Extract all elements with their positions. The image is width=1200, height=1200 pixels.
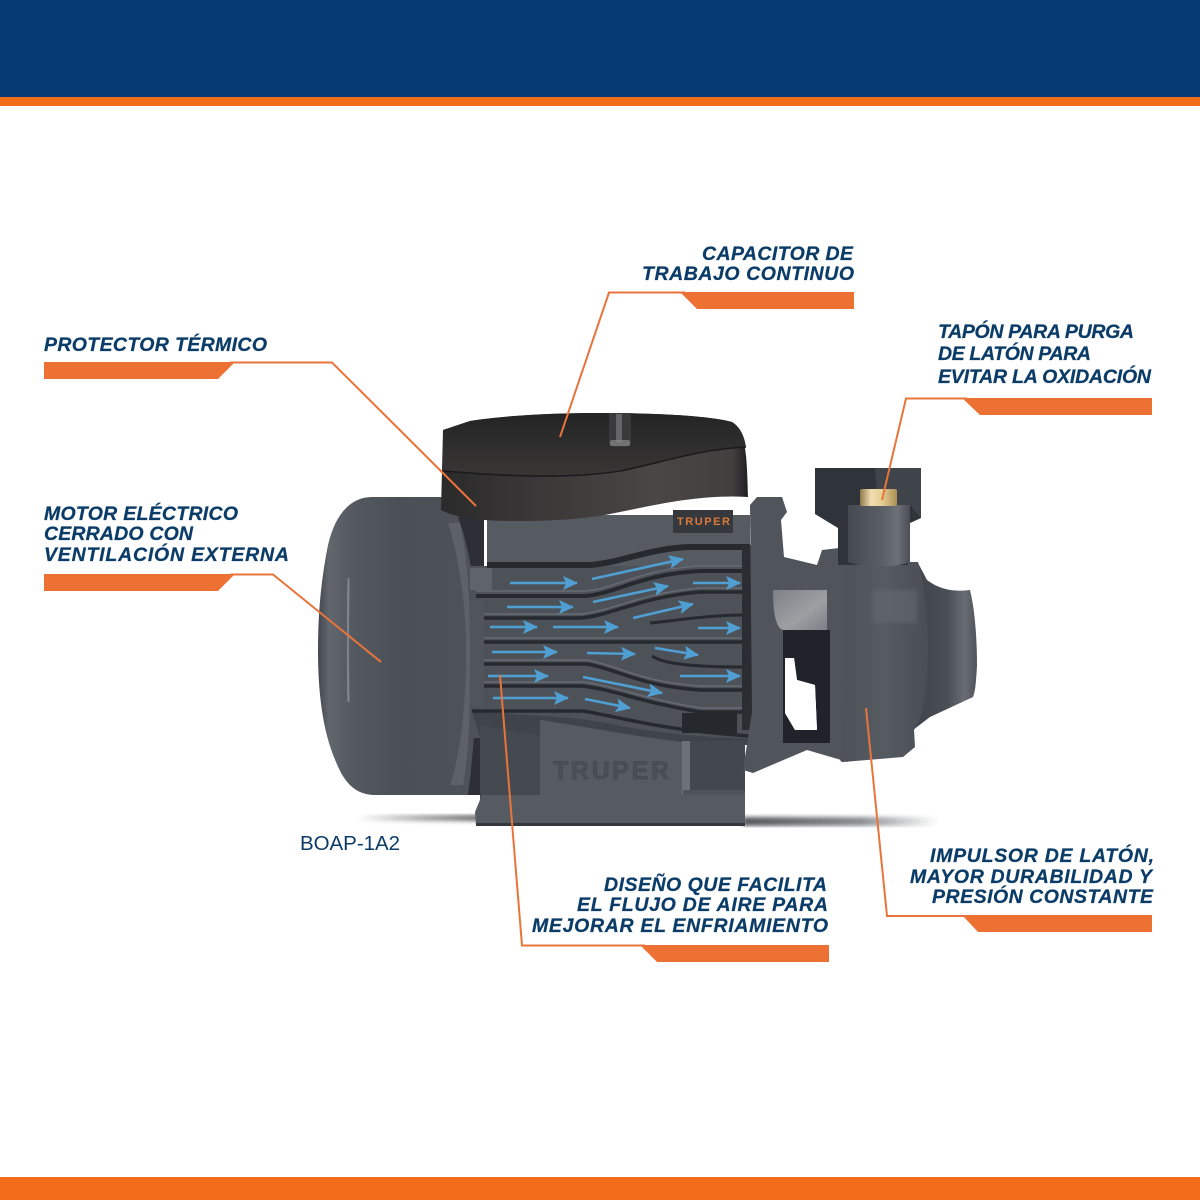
callout: tapon: TAPÓN PARA PURGA: [938, 320, 1134, 343]
callout: motor electrico: [44, 502, 381, 662]
callout: impulsor: PRESIÓN CONSTANTE: [932, 885, 1154, 908]
callout: diseno: [500, 675, 829, 962]
callout: impulsor: MAYOR DURABILIDAD Y: [910, 866, 1154, 888]
footer band: [0, 1177, 1200, 1200]
capacitor box: [441, 413, 748, 521]
volute casing: [840, 562, 928, 762]
callout: tapon: DE LATÓN PARA: [938, 342, 1091, 365]
outlet nose: [913, 563, 977, 730]
pump housing bracket: [743, 497, 848, 773]
callout: capacitor: CAPACITOR DE: [702, 243, 854, 265]
motor body with cooling fins: [470, 515, 752, 745]
ground shadow: [357, 815, 938, 826]
label: TRUPER badge: [673, 510, 733, 533]
label: TRUPER badge: TRUPER: [677, 516, 730, 528]
callout: tapon: [882, 320, 1152, 500]
callout: motor electrico: CERRADO CON: [44, 523, 194, 545]
callout: protector termico: [44, 333, 476, 506]
callout: impulsor: IMPULSOR DE LATÓN,: [930, 844, 1154, 867]
top port: [815, 468, 921, 566]
model code: BOAP-1A2: [300, 832, 400, 855]
callout: motor electrico: MOTOR ELÉCTRICO: [44, 502, 238, 525]
motor base with embossed brand: [475, 720, 745, 826]
brass purge plug: [860, 489, 897, 506]
header band: [0, 0, 1200, 106]
callout: diseno: MEJORAR EL ENFRIAMIENTO: [532, 915, 828, 937]
callout: protector termico: PROTECTOR TÉRMICO: [44, 333, 267, 356]
callout: capacitor: [560, 243, 854, 437]
callout: impulsor: [866, 708, 1154, 932]
callout: tapon: EVITAR LA OXIDACIÓN: [938, 365, 1152, 388]
callout: diseno: EL FLUJO DE AIRE PARA: [577, 894, 828, 916]
airflow arrows: [488, 559, 740, 708]
callout: diseno: DISEÑO QUE FACILITA: [604, 873, 827, 896]
embossed brand text: TRUPER: [553, 757, 669, 785]
pump illustration: [318, 413, 977, 826]
callout: capacitor: TRABAJO CONTINUO: [642, 263, 854, 285]
callout: motor electrico: VENTILACIÓN EXTERNA: [44, 543, 289, 566]
motor end cap: [318, 497, 484, 795]
